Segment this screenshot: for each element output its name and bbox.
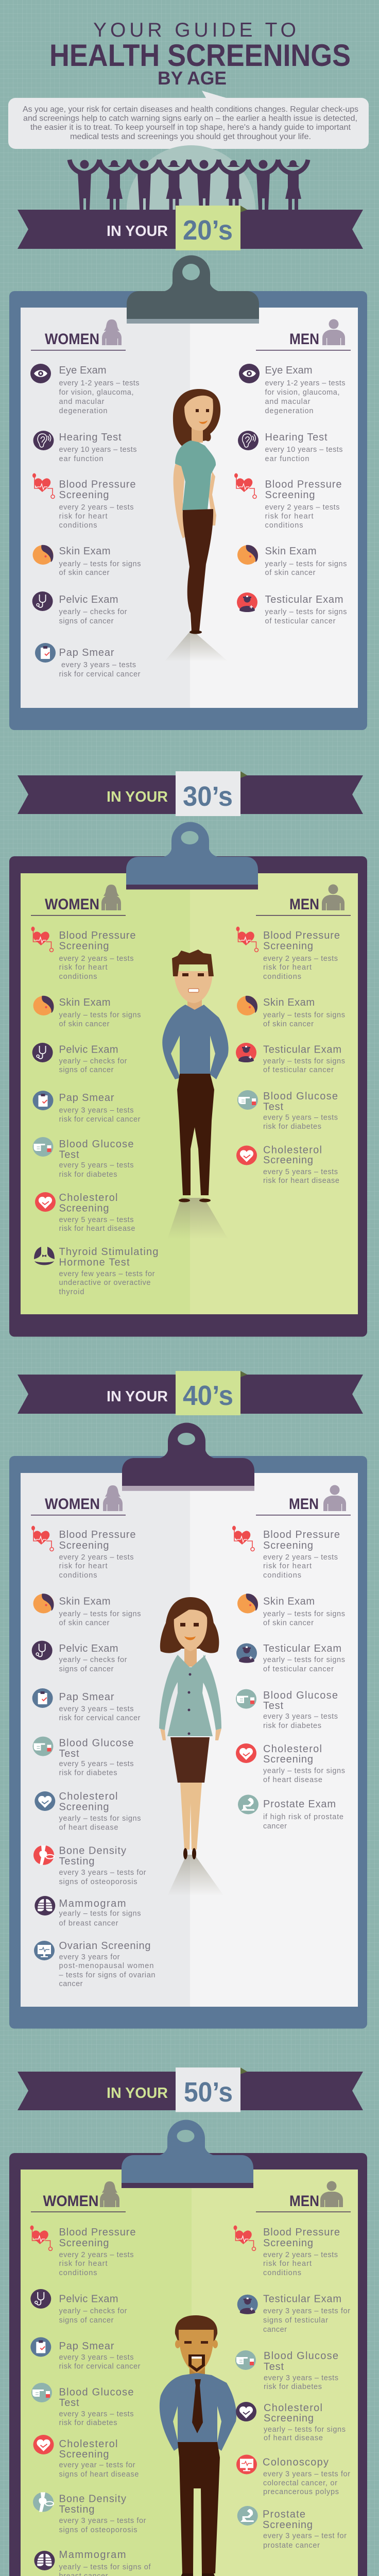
banner: in your 30s: 30’s [183, 781, 233, 812]
women: bone density: signs of osteoporosis [59, 1878, 137, 1886]
women: skin exam: Skin Exam [59, 997, 110, 1008]
men: testicular exam: of testicular cancer [265, 617, 336, 625]
men: skin exam: yearly – tests for signs [263, 1011, 345, 1020]
men: testicular exam [237, 2294, 350, 2334]
men: eye exam [239, 364, 345, 415]
men heading [256, 319, 351, 350]
men: testicular exam: cancer [263, 2326, 287, 2334]
men: colonoscopy: Colonoscopy [263, 2457, 329, 2468]
women: cholesterol: Screening [59, 1202, 109, 1214]
women: bone density [33, 2493, 146, 2534]
women: skin exam: of skin cancer [59, 569, 110, 577]
section: in your 40s [9, 1371, 367, 2029]
women: pap smear [32, 1688, 141, 1722]
women: skin exam: of skin cancer [59, 1020, 110, 1028]
women: skin exam: Skin Exam [59, 546, 110, 557]
women: cholesterol [35, 1192, 135, 1233]
banner: in your 30s [18, 771, 363, 816]
banner: in your 20s [18, 206, 363, 250]
banner: in your 50s: IN YOUR [107, 2085, 168, 2102]
women: cholesterol: signs of heart disease [59, 2470, 139, 2479]
men: skin exam: Skin Exam [265, 546, 316, 557]
decorative circle behind people [127, 145, 255, 210]
women: pelvic exam: yearly – checks for [59, 1656, 127, 1664]
men: blood pressure: Blood Pressure [263, 2227, 340, 2238]
women: thyroid [34, 1246, 159, 1296]
women: bone density: Testing [59, 1856, 95, 1867]
men heading [256, 2181, 351, 2212]
men: blood pressure: conditions [263, 1571, 301, 1580]
women: blood pressure [31, 1526, 136, 1580]
women: blood glucose: Test [59, 2397, 79, 2409]
women: cholesterol [33, 2435, 139, 2479]
men: testicular exam [236, 1043, 345, 1074]
men: blood pressure: Blood Pressure [263, 1529, 340, 1540]
women: blood pressure: Blood Pressure [59, 1529, 136, 1540]
women: blood pressure: conditions [59, 1571, 97, 1580]
women: blood glucose: Blood Glucose [59, 2386, 134, 2398]
women heading: WOMEN [45, 1496, 100, 1513]
men: eye exam: and macular [265, 398, 311, 406]
women: blood pressure: Screening [59, 2238, 109, 2249]
banner: in your 20s: 20’s [183, 215, 233, 246]
women: eye exam [30, 364, 139, 415]
men: colonoscopy: precancerous polyps [263, 2488, 339, 2496]
men: blood pressure: Blood Pressure [265, 479, 342, 490]
women: pap smear: risk for cervical cancer [59, 1714, 141, 1722]
men: eye exam: Eye Exam [265, 365, 312, 376]
women: mammogram [35, 1896, 141, 1928]
men: testicular exam: signs of testicular [263, 2316, 328, 2325]
men: colonoscopy: colorectal cancer, or [263, 2479, 337, 2487]
women: pap smear: every 3 years – tests [59, 1107, 134, 1115]
women: blood pressure: risk for heart [59, 1562, 107, 1570]
banner: in your 40s: 40’s [183, 1380, 233, 1411]
women: blood pressure: every 2 years – tests [59, 503, 134, 512]
women: hearing test [33, 431, 137, 463]
women: blood pressure: conditions [59, 521, 97, 530]
women: blood glucose: risk for diabetes [59, 1769, 117, 1777]
women: bone density: Bone Density [59, 2494, 126, 2505]
women heading [31, 885, 126, 916]
clipboard board [9, 2120, 367, 2576]
men: blood pressure [234, 2226, 340, 2277]
men: testicular exam: yearly – tests for signs [265, 608, 347, 616]
men: cholesterol: Screening [263, 1754, 313, 1765]
men: cholesterol: Cholesterol [264, 2402, 322, 2414]
women: pap smear [30, 2337, 141, 2371]
men: blood pressure: Screening [263, 941, 313, 952]
men: testicular exam: Testicular Exam [263, 1044, 341, 1055]
women: blood pressure: every 2 years – tests [59, 2251, 134, 2259]
men: skin exam [237, 1594, 345, 1627]
people row [70, 160, 308, 210]
men: prostate exam: cancer [263, 1822, 287, 1831]
section: in your 30s [9, 771, 367, 1336]
men: hearing test: every 10 years – tests [265, 446, 343, 454]
women: blood pressure: every 2 years – tests [59, 955, 134, 963]
title: by age: BY AGE [158, 67, 227, 89]
women: blood glucose [33, 1737, 134, 1777]
intro speech bubble: and screenings help to catch warning signs early on – the earlier a health issue is detected, [23, 114, 357, 123]
women: pap smear: Pap Smear [59, 2341, 114, 2352]
women: pap smear: risk for cervical cancer [59, 1115, 141, 1124]
women: blood pressure: Screening [59, 941, 109, 952]
women: ovarian screening: cancer [59, 1980, 83, 1988]
men: hearing test: Hearing Test [265, 432, 328, 443]
women: blood pressure: every 2 years – tests [59, 1553, 134, 1562]
intro speech bubble: the easier it is to treat. To keep yourself in top shape, here's a handy guide to important [30, 123, 351, 132]
section: in your 20s [9, 145, 367, 730]
women: pelvic exam: signs of cancer [59, 1665, 114, 1673]
women: thyroid: Thyroid Stimulating [59, 1246, 159, 1258]
women: skin exam [33, 996, 141, 1028]
women: ovarian screening [34, 1940, 156, 1988]
men: eye exam: every 1-2 years – tests [265, 379, 345, 387]
men: blood glucose: Blood Glucose [263, 1690, 338, 1701]
women: blood pressure [31, 926, 136, 981]
men: skin exam [237, 996, 345, 1028]
women: pap smear: every 3 years – tests [61, 661, 136, 669]
men: eye exam: for vision, glaucoma, [265, 388, 340, 397]
men: blood pressure: risk for heart [263, 2260, 312, 2268]
men: blood glucose: every 3 years – tests [263, 1713, 338, 1721]
women: pap smear: every 3 years – tests [59, 1705, 134, 1714]
men: cholesterol: of heart disease [263, 1776, 322, 1784]
men: blood pressure [234, 473, 342, 530]
women: blood glucose: every 5 years – tests [59, 1760, 134, 1768]
title: health screenings: HEALTH SCREENINGS [49, 38, 351, 73]
women: cholesterol: yearly – tests for signs [59, 1815, 141, 1823]
header [8, 19, 369, 149]
women: ovarian screening: post-menopausal women [59, 1962, 153, 1970]
clipboard board [9, 1423, 367, 2029]
women: blood glucose: Test [59, 1748, 79, 1759]
men: blood pressure: every 2 years – tests [263, 955, 338, 963]
men: cholesterol: Cholesterol [263, 1743, 322, 1755]
women: skin exam: yearly – tests for signs [59, 1011, 141, 1020]
women: eye exam: every 1-2 years – tests [59, 379, 139, 387]
women: cholesterol: every 5 years – tests [59, 1216, 134, 1224]
women: cholesterol: of heart disease [59, 1824, 118, 1832]
men: blood glucose [235, 2350, 338, 2391]
women: skin exam [33, 1594, 141, 1627]
men heading: MEN [289, 1496, 319, 1513]
men: hearing test [238, 431, 343, 463]
women: bone density: Bone Density [59, 1845, 126, 1857]
women heading [31, 319, 126, 350]
men: skin exam: of skin cancer [263, 1619, 314, 1627]
men: cholesterol: Screening [264, 2413, 314, 2424]
women: thyroid: Hormone Test [59, 1257, 130, 1268]
men heading: MEN [289, 2193, 319, 2210]
women: pelvic exam: yearly – checks for [59, 608, 127, 616]
banner: in your 40s [18, 1371, 363, 1415]
men: testicular exam: every 3 years – tests for [263, 2307, 350, 2315]
men: skin exam: of skin cancer [263, 1020, 314, 1028]
men: testicular exam: Testicular Exam [265, 594, 343, 605]
men heading [256, 884, 351, 916]
men: cholesterol [236, 2402, 346, 2442]
men: prostate screening: Screening [263, 2519, 313, 2531]
men: testicular exam: Testicular Exam [263, 1643, 341, 1654]
women: skin exam [33, 545, 141, 577]
men: blood pressure: Screening [263, 2238, 313, 2249]
women: cholesterol [35, 1791, 141, 1832]
men: blood glucose: risk for diabetes [263, 1722, 321, 1730]
women: pelvic exam: yearly – checks for [59, 2307, 127, 2315]
women: mammogram: Mammogram [59, 1898, 126, 1909]
banner: in your 30s: IN YOUR [107, 789, 168, 805]
women: blood pressure: Blood Pressure [59, 479, 136, 490]
women: blood pressure: risk for heart [59, 512, 107, 520]
women heading: WOMEN [45, 896, 99, 913]
women: blood glucose: every 3 years – tests [59, 2410, 134, 2418]
women: hearing test: Hearing Test [59, 432, 122, 443]
men: blood pressure: every 2 years – tests [265, 503, 340, 512]
men: blood glucose: every 3 years – tests [264, 2374, 338, 2382]
women: blood pressure: conditions [59, 2269, 97, 2277]
men: prostate screening: prostate cancer [263, 2541, 320, 2550]
women: blood glucose: every 5 years – tests [59, 1161, 134, 1170]
women: mammogram: yearly – tests for signs of [59, 2563, 151, 2571]
women: cholesterol: Screening [59, 1802, 109, 1813]
women: blood pressure: risk for heart [59, 963, 107, 972]
men: hearing test: ear function [265, 455, 309, 463]
women: cholesterol: every year – tests for [59, 2461, 135, 2469]
women: pelvic exam: Pelvic Exam [59, 594, 118, 605]
women: blood pressure [30, 2226, 136, 2277]
men: blood pressure: Screening [265, 489, 315, 501]
women: eye exam: degeneration [59, 407, 107, 415]
women: pap smear: Pap Smear [59, 1092, 114, 1104]
women: pelvic exam [32, 1043, 127, 1074]
men: cholesterol [236, 1145, 339, 1185]
men: skin exam [237, 545, 347, 577]
men: blood glucose [237, 1090, 338, 1131]
women: blood pressure: Screening [59, 1540, 109, 1551]
men: blood pressure: conditions [263, 2269, 301, 2277]
women: thyroid: thyroid [59, 1288, 84, 1296]
women: pap smear [33, 1091, 141, 1124]
women: pelvic exam: signs of cancer [59, 617, 114, 625]
men: colonoscopy [236, 2454, 350, 2496]
women: blood glucose: risk for diabetes [59, 1171, 117, 1179]
women: skin exam: yearly – tests for signs [59, 1610, 141, 1618]
women: skin exam: of skin cancer [59, 1619, 110, 1627]
men: skin exam: yearly – tests for signs [265, 560, 347, 568]
intro speech bubble: medical tests and screenings you should get throughout your life. [70, 132, 311, 141]
women: ovarian screening: Ovarian Screening [59, 1940, 150, 1952]
women: blood glucose: risk for diabetes [59, 2419, 117, 2427]
banner: in your 50s: 50’s [184, 2077, 233, 2108]
women: cholesterol: Cholesterol [59, 1192, 117, 1204]
men: blood glucose: Test [264, 2361, 284, 2372]
women heading [31, 1485, 126, 1516]
men: blood pressure: conditions [265, 521, 303, 530]
men: cholesterol: of heart disease [264, 2434, 323, 2442]
women: pelvic exam: Pelvic Exam [59, 1044, 118, 1055]
women: pap smear: risk for cervical cancer [59, 670, 141, 679]
banner: in your 20s: IN YOUR [107, 223, 168, 240]
women: blood glucose: Blood Glucose [59, 1139, 134, 1150]
women: cholesterol: Screening [59, 2449, 109, 2460]
men: prostate screening: Prostate [263, 2509, 305, 2520]
women: pelvic exam [32, 1641, 127, 1673]
men heading: MEN [289, 331, 319, 348]
women: ovarian screening: – tests for signs of ovarian [59, 1971, 156, 1979]
women: pap smear: every 3 years – tests [59, 2353, 134, 2362]
men: eye exam: degeneration [265, 407, 313, 415]
men: blood glucose: every 5 years – tests [263, 1114, 338, 1122]
women: bone density [33, 1845, 146, 1886]
title: your guide to: YOUR GUIDE TO [93, 19, 296, 41]
men: blood glucose: Test [263, 1101, 283, 1113]
women: pelvic exam: Pelvic Exam [59, 1643, 118, 1654]
intro speech bubble: As you age, your risk for certain diseases and health conditions changes. Regular check-ups [23, 105, 358, 114]
women heading [31, 2181, 126, 2212]
women: pelvic exam [30, 2289, 127, 2325]
women: ovarian screening: every 3 years for [59, 1953, 120, 1961]
figure: man with hands in pockets [162, 950, 229, 1239]
men: testicular exam: yearly – tests for signs [263, 1057, 345, 1065]
section: in your 50s [9, 2067, 367, 2576]
women: blood glucose: Test [59, 1149, 79, 1160]
intro speech bubble [8, 91, 369, 149]
men: cholesterol: risk for heart disease [263, 1177, 339, 1185]
women: pap smear: risk for cervical cancer [59, 2363, 141, 2371]
women: pelvic exam: signs of cancer [59, 1066, 114, 1074]
women: blood pressure: Blood Pressure [59, 2227, 136, 2238]
men: prostate exam: Prostate Exam [263, 1799, 336, 1810]
men: blood glucose [236, 1689, 338, 1730]
men: blood pressure: risk for heart [263, 1562, 312, 1570]
men: cholesterol: Cholesterol [263, 1145, 322, 1156]
men: prostate exam [238, 1795, 343, 1831]
women: pelvic exam: yearly – checks for [59, 1057, 127, 1065]
women: pap smear: Pap Smear [59, 1691, 114, 1703]
women: pap smear [35, 643, 141, 679]
men: blood pressure: Screening [263, 1540, 313, 1551]
women: blood pressure: conditions [59, 973, 97, 981]
women: cholesterol: Cholesterol [59, 1791, 117, 1802]
women: blood pressure: risk for heart [59, 2260, 107, 2268]
men: blood pressure: risk for heart [263, 963, 312, 972]
men: testicular exam: of testicular cancer [263, 1665, 334, 1673]
women: blood glucose [31, 2383, 134, 2427]
men: cholesterol: Screening [263, 1155, 313, 1166]
men: blood pressure: every 2 years – tests [263, 1553, 338, 1562]
women: cholesterol: risk for heart disease [59, 1225, 135, 1233]
men: skin exam: Skin Exam [263, 1596, 315, 1607]
women: pelvic exam [32, 591, 127, 625]
women: skin exam: Skin Exam [59, 1596, 110, 1607]
women: bone density: every 3 years – tests for [59, 1869, 146, 1877]
women: blood pressure: Blood Pressure [59, 930, 136, 941]
men heading [256, 1485, 351, 1516]
men: testicular exam [236, 1643, 345, 1673]
figure: woman in jacket [159, 1597, 224, 1896]
figure: man with goatee and tie [160, 2315, 236, 2576]
women: mammogram: yearly – tests for signs [59, 1910, 141, 1918]
clipboard board [9, 256, 367, 730]
men: prostate screening [237, 2506, 347, 2550]
women: blood pressure: Screening [59, 489, 109, 501]
men: skin exam: of skin cancer [265, 569, 316, 577]
women: blood pressure [32, 473, 136, 530]
men heading: MEN [289, 896, 319, 913]
women: pelvic exam: Pelvic Exam [59, 2294, 118, 2305]
men: blood pressure [236, 926, 340, 981]
men: testicular exam: yearly – tests for signs [263, 1656, 345, 1664]
women: hearing test: every 10 years – tests [59, 446, 137, 454]
men: testicular exam: of testicular cancer [263, 1066, 334, 1074]
women: thyroid: every few years – tests for [59, 1270, 155, 1278]
men: cholesterol: yearly – tests for signs [263, 1767, 345, 1775]
men: blood glucose: risk for diabetes [263, 1123, 321, 1131]
men: blood pressure: every 2 years – tests [263, 2251, 338, 2259]
women: mammogram: of breast cancer [59, 1920, 118, 1928]
men: blood pressure: conditions [263, 973, 301, 981]
men: skin exam: Skin Exam [263, 997, 315, 1008]
women: eye exam: and macular [59, 398, 105, 406]
men: blood glucose: Blood Glucose [263, 1091, 338, 1102]
banner: in your 50s [18, 2067, 363, 2112]
men: skin exam: yearly – tests for signs [263, 1610, 345, 1618]
women: hearing test: ear function [59, 455, 103, 463]
men: colonoscopy: every 3 years – tests for [263, 2470, 350, 2479]
men: cholesterol: every 5 years – tests [263, 1168, 338, 1176]
men: testicular exam: Testicular Exam [263, 2294, 341, 2305]
women: pelvic exam: signs of cancer [59, 2316, 114, 2325]
men: blood pressure [232, 1526, 340, 1580]
clipboard board [9, 822, 367, 1336]
women heading: WOMEN [43, 2193, 99, 2210]
women: eye exam: for vision, glaucoma, [59, 388, 134, 397]
men: prostate screening: every 3 years – test for [263, 2532, 347, 2540]
women: mammogram: Mammogram [59, 2549, 126, 2561]
women: thyroid: underactive or overactive [59, 1279, 150, 1287]
women: blood glucose [33, 1137, 134, 1179]
women: bone density: Testing [59, 2504, 95, 2515]
men: cholesterol [236, 1743, 345, 1784]
men: blood glucose: Test [263, 1700, 283, 1711]
women: eye exam: Eye Exam [59, 365, 106, 376]
women: skin exam: yearly – tests for signs [59, 560, 141, 568]
women heading: WOMEN [45, 331, 99, 348]
men: cholesterol: yearly – tests for signs [264, 2426, 346, 2434]
women: cholesterol: Cholesterol [59, 2438, 117, 2450]
men: blood pressure: risk for heart [265, 512, 313, 520]
men: blood glucose: risk for diabetes [264, 2383, 322, 2391]
women: pap smear: Pap Smear [59, 647, 114, 658]
men: blood pressure: Blood Pressure [263, 930, 340, 941]
men: blood glucose: Blood Glucose [264, 2350, 338, 2362]
figure: young woman [164, 389, 228, 662]
women: bone density: every 3 years – tests for [59, 2517, 146, 2525]
men: prostate exam: if high risk of prostate [263, 1813, 343, 1821]
banner: in your 40s: IN YOUR [107, 1388, 168, 1405]
women: blood glucose: Blood Glucose [59, 1738, 134, 1749]
men: testicular exam [237, 592, 347, 625]
women: mammogram [34, 2549, 151, 2576]
women: bone density: signs of osteoporosis [59, 2526, 137, 2534]
